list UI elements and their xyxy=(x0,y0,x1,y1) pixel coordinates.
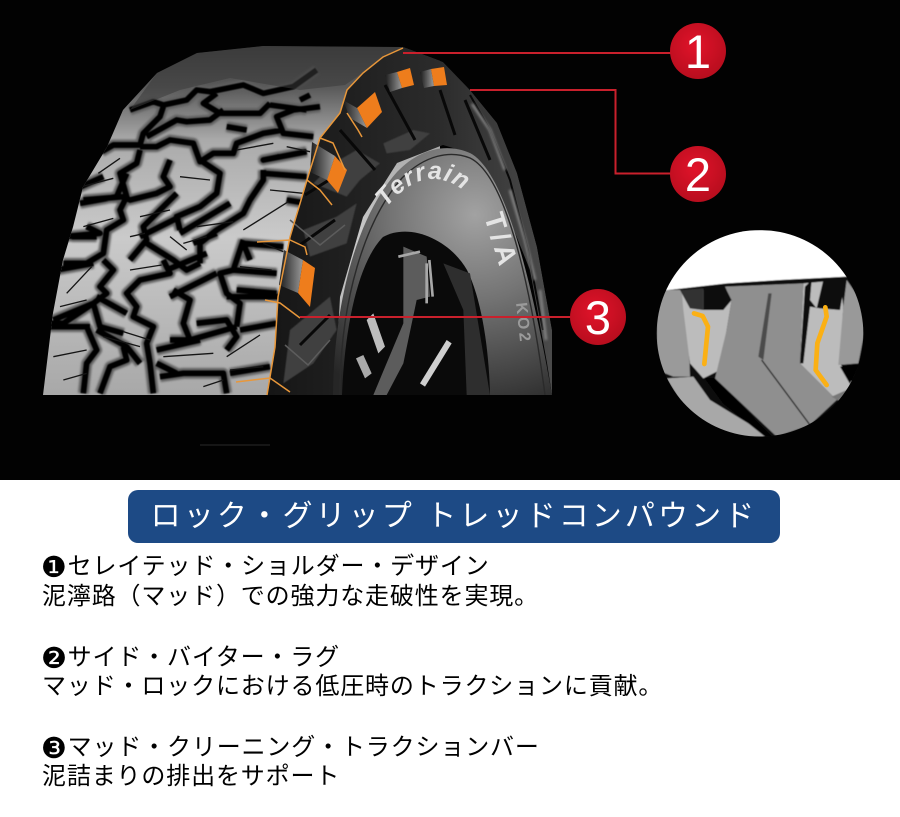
sidewall lettering: KO2 xyxy=(512,302,533,345)
magnified tread detail circle xyxy=(656,230,864,437)
text block: feature 1 description: 泥濘路（マッド）での強力な走破性を実現。 xyxy=(42,583,539,610)
heading banner: ロック・グリップ トレッドコンパウンド xyxy=(151,500,757,533)
orange outline of shoulder xyxy=(236,48,403,395)
faint reflection line below tire xyxy=(200,444,270,446)
shoulder band xyxy=(267,47,552,395)
callout line 3 xyxy=(300,316,580,318)
shoulder lug highlights xyxy=(283,130,430,383)
text block: feature 1 title: セレイテッド・ショルダー・デザイン xyxy=(68,553,490,580)
sidewall lettering: T/A xyxy=(478,209,525,272)
callout marker 3 xyxy=(570,289,626,345)
callout line 1 xyxy=(403,52,680,54)
tire xyxy=(43,46,552,395)
sidewall xyxy=(333,148,552,395)
callout marker 2: 2 xyxy=(685,148,711,201)
tire illustration panel xyxy=(0,0,900,480)
text block: feature 3 title: ❸ xyxy=(41,731,67,765)
wheel spokes xyxy=(356,247,490,395)
sidewall lugs xyxy=(285,85,543,365)
callout marker 1 xyxy=(670,23,726,79)
callout marker 1: 1 xyxy=(685,25,711,78)
callout marker 2 xyxy=(670,146,726,202)
sidewall lettering: Terrain xyxy=(374,164,468,204)
orange compound strip right xyxy=(816,307,827,385)
outer shoulder highlights xyxy=(472,104,546,340)
sidewall inner ring xyxy=(340,154,545,395)
heading banner xyxy=(128,490,780,543)
text block: feature 2 title: サイド・バイター・ラグ xyxy=(68,644,340,671)
orange tread blocks xyxy=(279,67,447,307)
sidewall lettering xyxy=(374,164,531,342)
text block: feature 3 description: 泥詰まりの排出をサポート xyxy=(42,763,340,790)
callout line 2 xyxy=(470,90,680,174)
tread grooves xyxy=(43,70,320,393)
text block: feature 3 title: マッド・クリーニング・トラクションバー xyxy=(68,734,540,761)
tread surface xyxy=(40,40,440,400)
callout marker 3: 3 xyxy=(585,291,611,344)
top of tread, dim texture xyxy=(130,64,372,110)
wheel opening xyxy=(342,232,490,395)
orange compound strip left xyxy=(694,313,708,364)
text block: feature 2 title: ❷ xyxy=(41,641,67,675)
text block: feature 2 description: マッド・ロックにおける低圧時のトラクションに貢献。 xyxy=(42,673,663,700)
text block: feature 1 title: ❶ xyxy=(41,550,67,584)
tread sipes xyxy=(53,143,310,387)
